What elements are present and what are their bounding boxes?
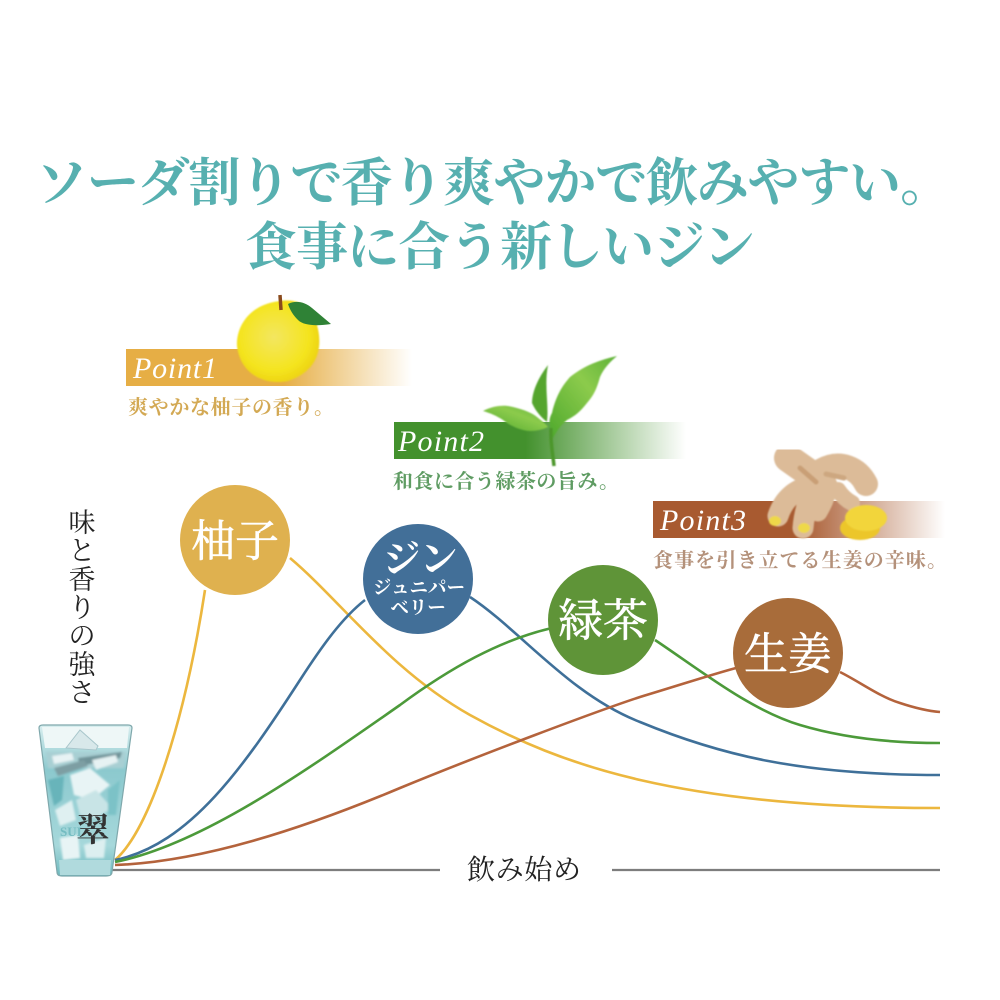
icon: ginger [769, 458, 887, 540]
curves [115, 558, 940, 865]
point 2 label: Point2 [397, 425, 484, 458]
glass logo: 翠 [76, 804, 110, 851]
circle: green tea [548, 565, 658, 675]
baseline axis [112, 869, 940, 871]
circle: ginger [733, 598, 843, 708]
glass logo: SUI [60, 824, 82, 839]
y-axis label: と [68, 529, 96, 568]
icon: tea leaves [483, 356, 617, 466]
curve: yuzu [115, 558, 940, 860]
y-axis label: り [68, 586, 96, 625]
point 3 caption: 食事を引き立てる生姜の辛味。 [653, 544, 947, 573]
circle: juniper berry: ジン [382, 528, 458, 583]
y-axis label: さ [68, 671, 96, 710]
point 3 label: Point3 [659, 504, 746, 537]
icon: glass [39, 725, 132, 876]
circle: juniper berry [363, 524, 473, 634]
circle: juniper berry: ジュニパー [373, 574, 465, 600]
circle: yuzu [180, 485, 290, 595]
y-axis label: 強 [68, 643, 96, 682]
glass logo [60, 804, 110, 851]
point 1 label: Point1 [132, 352, 217, 385]
y-axis label: の [68, 614, 96, 653]
point 1 caption: 爽やかな柚子の香り。 [128, 391, 334, 420]
axis label: 飲み始め [467, 848, 581, 888]
icon: yuzu [237, 295, 331, 382]
circle: yuzu: 柚子 [191, 505, 279, 569]
curve: juniper [115, 597, 940, 860]
circle: green tea: 緑茶 [558, 584, 648, 649]
title: ソーダ割りで香り爽やかで飲みやすい。 [36, 141, 952, 216]
y-axis label: 味 [68, 501, 96, 540]
curve: green tea [115, 628, 940, 862]
circle: ginger: 生姜 [744, 618, 833, 682]
curve: ginger [115, 668, 940, 865]
title [36, 141, 952, 280]
point 1 banner [126, 349, 412, 386]
y-axis label [68, 501, 96, 710]
title: 食事に合う新しいジン [245, 205, 755, 280]
circle: juniper berry: ベリー [390, 594, 446, 620]
point 3 banner [653, 501, 945, 538]
point 2 caption: 和食に合う緑茶の旨み。 [393, 465, 619, 494]
point 2 banner [394, 422, 686, 459]
y-axis label: 香 [68, 558, 96, 597]
